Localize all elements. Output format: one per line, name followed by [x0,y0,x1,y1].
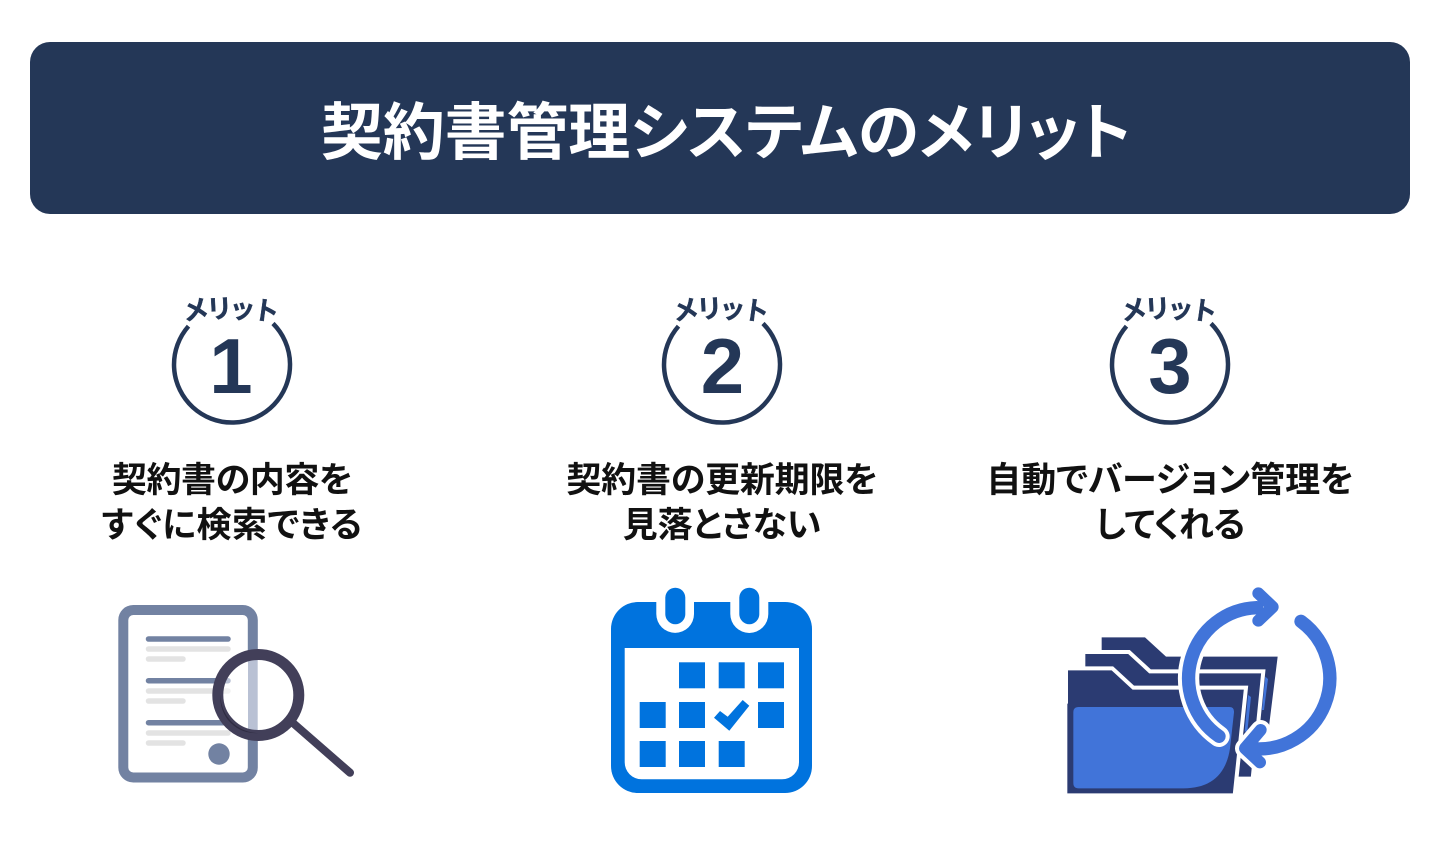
title banner [30,42,1410,214]
badge: merit 1: ト [251,294,281,328]
badge: merit 1 [174,293,290,423]
icon: folders with sync arrows [1065,593,1330,795]
text: merit 1 description: 契約書の内容を [112,461,352,500]
badge: merit 3 [1112,293,1228,423]
text: merit 3 description: してくれる [1095,506,1245,545]
badge: merit 2: メ [671,293,701,327]
badge: merit 2: ッ [719,293,746,325]
badge: merit 2: ト [741,294,771,328]
badge: merit 1: 1 [209,322,253,410]
badge: merit 3: ッ [1167,293,1194,325]
title banner: 契約書管理システムのメリット [321,99,1131,168]
text: merit 3 description: 自動でバージョン管理を [986,461,1354,500]
badge: merit 2 [664,293,780,423]
badge: merit 1: メ [181,293,211,327]
badge: merit 3: 3 [1148,322,1192,410]
badge: merit 3: ト [1189,294,1219,328]
text: merit 2 description [566,461,878,545]
badge: merit 3: リ [1144,293,1171,325]
icon: document with magnifying glass [123,610,350,778]
badge: merit 2: 2 [701,322,744,410]
icon: calendar with check mark [611,588,812,793]
text: merit 2 description: 見落とさない [623,506,821,545]
text: merit 3 description [986,461,1354,545]
badge: merit 2: リ [696,293,723,325]
text: merit 1 description [101,461,363,545]
badge: merit 1: ッ [229,293,256,325]
badge: merit 1: リ [206,293,233,325]
text: merit 1 description: すぐに検索できる [101,506,363,545]
badge: merit 3: メ [1119,293,1149,327]
text: merit 2 description: 契約書の更新期限を [566,461,878,500]
